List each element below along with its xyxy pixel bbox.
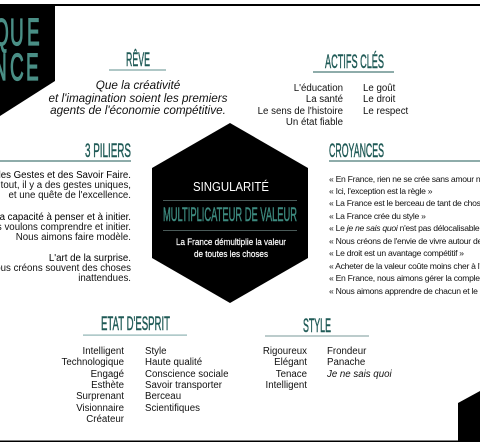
list: actifs right column: Le respect xyxy=(363,106,409,117)
list: etat right column: Scientifiques xyxy=(145,403,200,414)
list: etat left column xyxy=(62,346,125,425)
list: actifs left column xyxy=(258,83,343,128)
text: pilier 1: et une quête de l'excellence. xyxy=(8,190,131,201)
hexagon text: La France démultiplie la valeur xyxy=(176,237,286,248)
panel: 3 piliers xyxy=(0,141,131,284)
list: etat left column: Créateur xyxy=(86,414,125,425)
list: croyances: « En France, rien ne se crée sans amour ni xyxy=(329,174,480,184)
list: etat right column xyxy=(145,346,228,414)
panel: rêve xyxy=(49,49,228,117)
list: etat right column: Berceau xyxy=(145,391,181,402)
list: etat right column: Savoir transporter xyxy=(145,380,223,391)
list: croyances xyxy=(329,174,480,296)
list: croyances: « Le droit est un avantage compétitif » xyxy=(329,248,464,258)
heading: 3 piliers: 3 PILIERS xyxy=(85,141,131,162)
list: actifs left column: La santé xyxy=(306,94,343,105)
list: style left column: Elégant xyxy=(274,357,307,368)
list: actifs right column: Le goût xyxy=(363,83,396,94)
list: style left column: Rigoureux xyxy=(263,346,307,357)
list: style right column xyxy=(326,346,392,380)
text: rêve: Que la créativité xyxy=(96,79,181,92)
list: etat left column: Esthète xyxy=(91,380,124,391)
list: croyances: « Nous créons de l'envie de vivre autour de xyxy=(329,236,480,246)
list: etat left column: Visionnaire xyxy=(76,403,124,414)
list: etat left column: Engagé xyxy=(91,369,124,380)
text: pilier 3: L'art de la surprise. xyxy=(49,253,131,264)
list: actifs left column: Le sens de l'histoire xyxy=(258,106,343,117)
panel: rêve: RÊVE xyxy=(126,49,150,71)
panel: style: STYLE xyxy=(303,316,331,337)
panel: croyances xyxy=(329,141,480,296)
central hexagon: MULTIPLICATEUR DE VALEUR xyxy=(163,205,297,226)
list: croyances: « Le je ne sais quoi n'est pas délocalisable xyxy=(329,223,480,233)
list: etat left column: Intelligent xyxy=(83,346,124,357)
panel: etat d'esprit xyxy=(62,314,228,425)
text: rêve: et l'imagination soient les premiers xyxy=(49,92,228,105)
list: croyances: « Ici, l'exception est la règle » xyxy=(329,186,433,196)
text: pilier 2: Nous aimons faire modèle. xyxy=(16,232,131,243)
text: pilier 1 xyxy=(0,170,131,201)
list: etat right column: Haute qualité xyxy=(145,357,202,368)
text: pilier 2: s voulons comprendre et initier. xyxy=(0,222,131,233)
list: etat right column: Style xyxy=(145,346,167,357)
list: actifs left column: Un état fiable xyxy=(286,117,343,128)
panel: croyances: CROYANCES xyxy=(329,141,384,162)
hexagon text xyxy=(176,237,286,260)
hexagon heading: SINGULARITÉ xyxy=(193,179,269,194)
panel: actifs clés xyxy=(258,52,409,128)
list: croyances: « En France, nous aimons gérer la complex xyxy=(329,273,480,283)
hexagon text: de toutes les choses xyxy=(194,249,268,260)
text: rêve: agents de l'économie compétitive. xyxy=(50,104,226,117)
list: style left column: Tenace xyxy=(276,369,307,380)
list: style right column: Je ne sais quoi xyxy=(326,369,392,380)
list: actifs right column xyxy=(363,83,409,117)
central hexagon xyxy=(152,123,308,303)
heading: etat d'esprit: ETAT D'ESPRIT xyxy=(101,314,170,335)
list: actifs left column: L'éducation xyxy=(294,83,343,94)
title banner xyxy=(0,5,55,116)
list: croyances: « Nous aimons apprendre de chacun et le r xyxy=(329,286,480,296)
list: style left column: Intelligent xyxy=(266,380,307,391)
list: actifs right column: Le droit xyxy=(363,94,396,105)
list: croyances: « La France crée du style » xyxy=(329,211,426,221)
panel: style xyxy=(263,316,392,391)
list: style right column: Frondeur xyxy=(327,346,367,357)
corner shape bottom right xyxy=(458,391,480,441)
text: rêve xyxy=(49,79,228,117)
list: style right column: Panache xyxy=(327,357,365,368)
text: pilier 3 xyxy=(0,253,131,284)
text: pilier 2 xyxy=(0,212,131,243)
list: etat left column: Surprenant xyxy=(76,391,124,402)
list: etat right column: Conscience sociale xyxy=(145,369,228,380)
list: etat left column: Technologique xyxy=(62,357,124,368)
list: style left column xyxy=(263,346,307,391)
panel: actifs clés: ACTIFS CLÉS xyxy=(325,52,384,73)
text: pilier 1: tout, il y a des gestes uniques, xyxy=(1,180,131,191)
text: pilier 3: inattendues. xyxy=(78,273,131,284)
list: croyances: « Acheter de la valeur coûte moins cher à l' xyxy=(329,261,480,271)
